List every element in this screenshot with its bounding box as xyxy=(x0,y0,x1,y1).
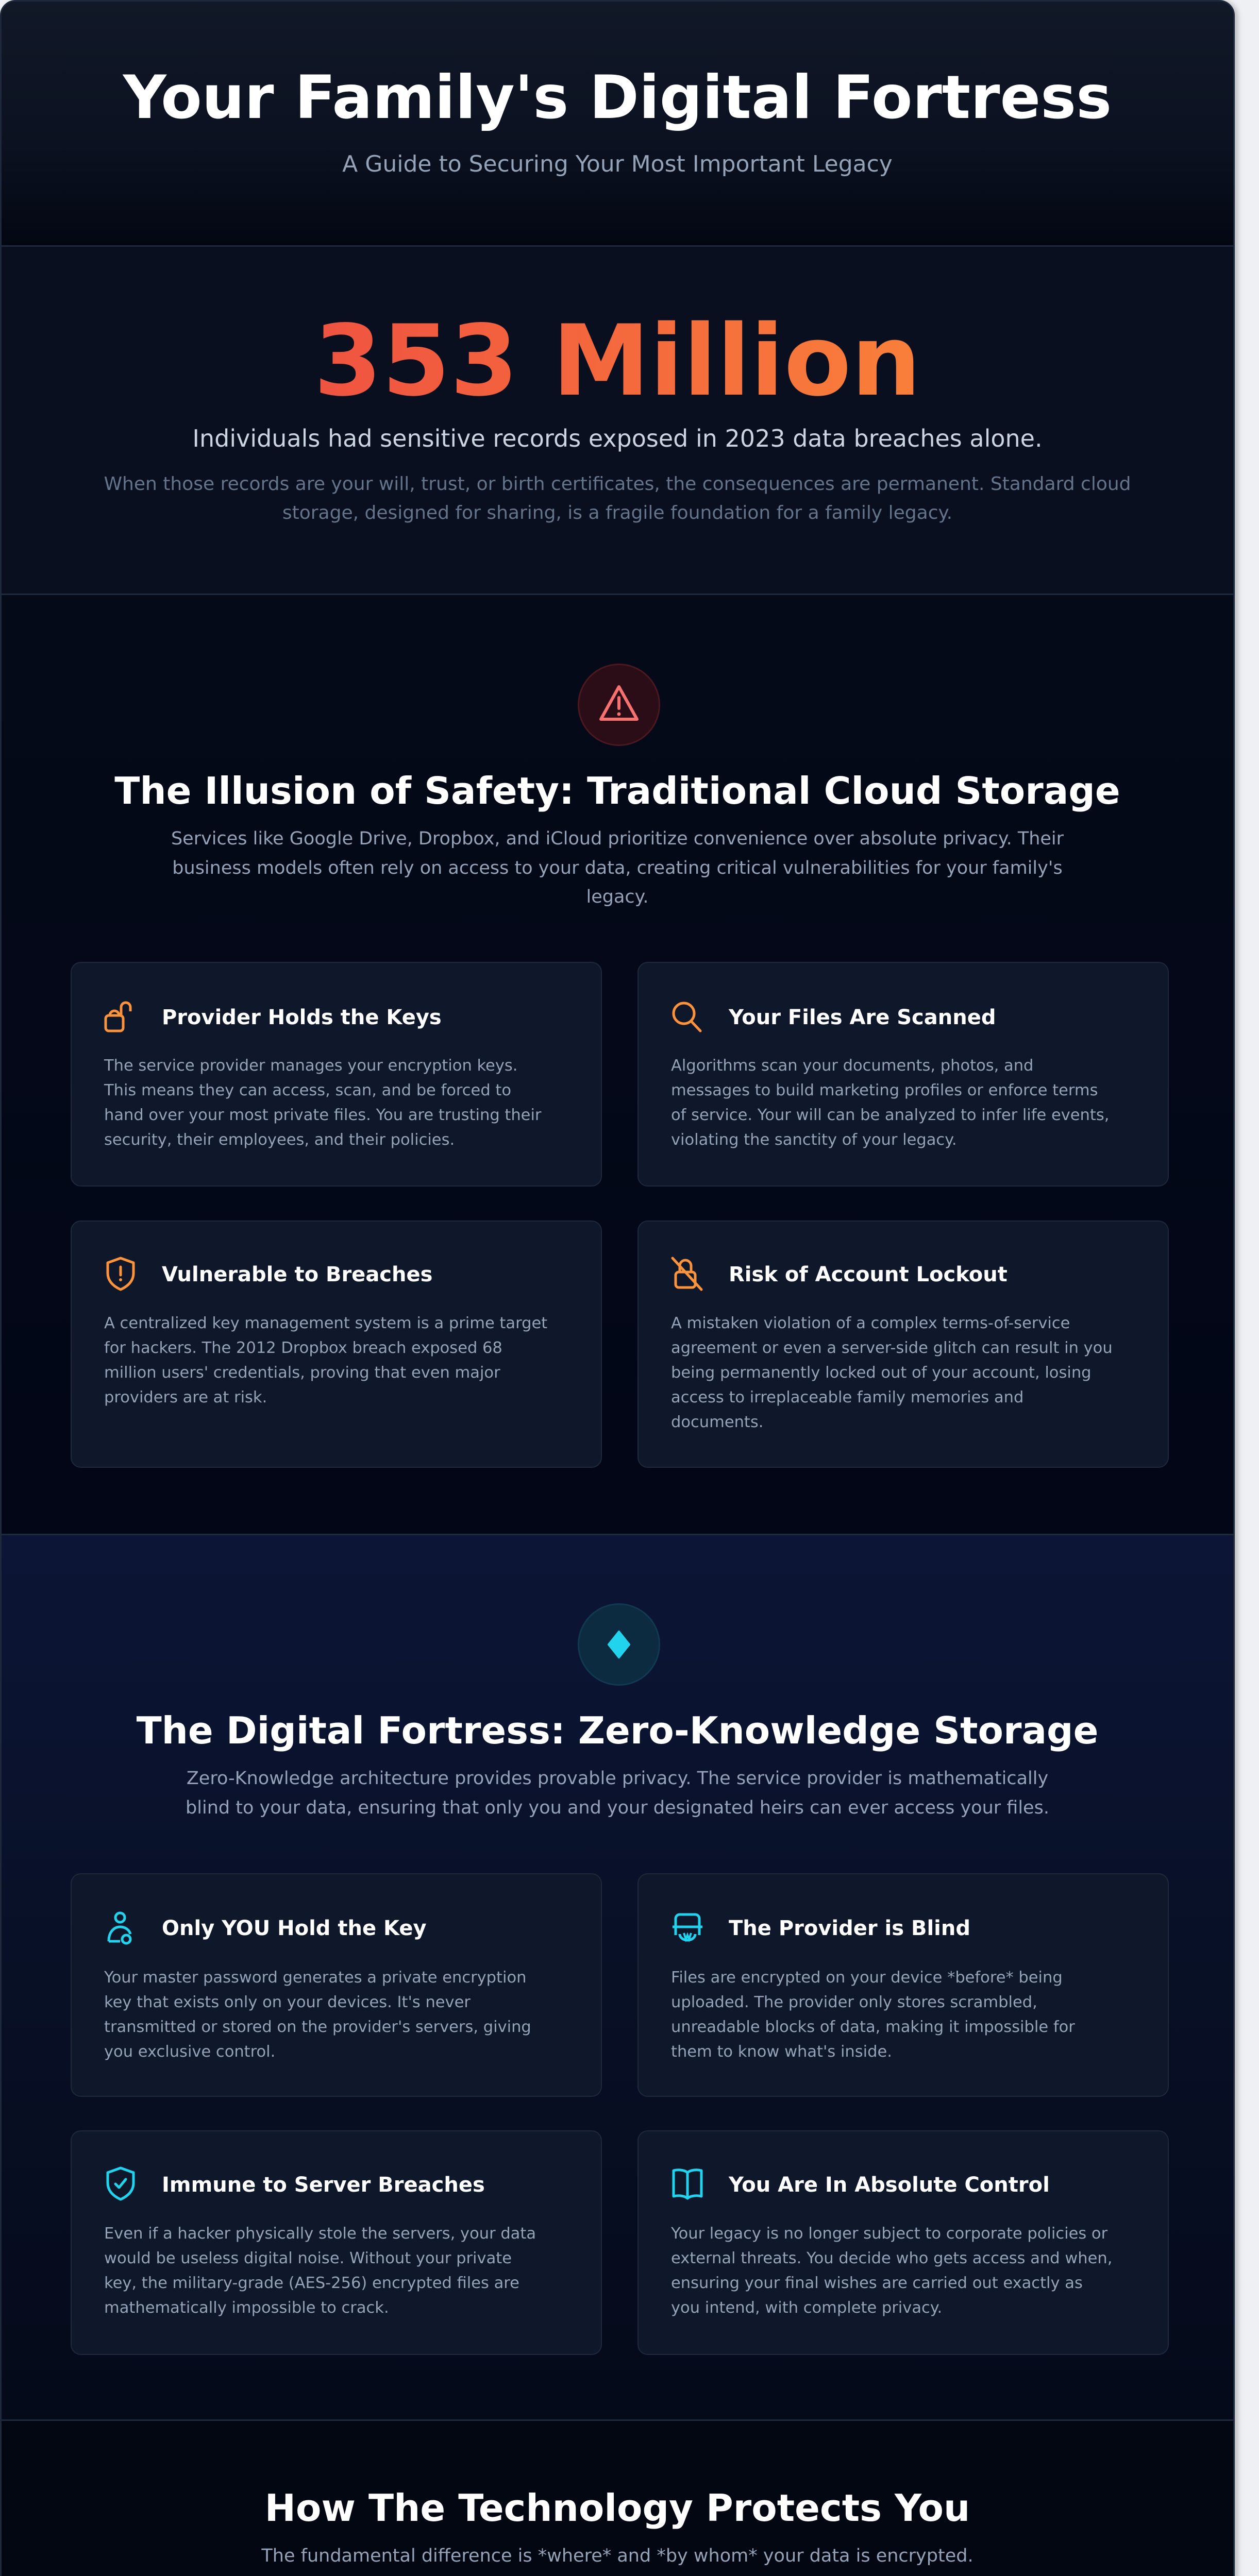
description xyxy=(171,828,1064,907)
card: breaches xyxy=(71,1221,602,1468)
heading: The Illusion of Safety: Traditional Cloud Storage xyxy=(114,769,1120,812)
card: files scanned: messages to build marketing profiles or enforce terms xyxy=(671,1081,1098,1099)
card: immune to breaches: key, the military-grade (AES-256) encrypted files are xyxy=(104,2274,519,2292)
card: only you hold key xyxy=(71,1873,602,2097)
panel: zero-knowledge xyxy=(2,1535,1233,2421)
panel: how technology protects xyxy=(2,2421,1233,2576)
icon: crossed lock xyxy=(671,1257,703,1291)
icon: shield check xyxy=(106,2167,135,2201)
header section xyxy=(2,2,1233,247)
card: provider blind xyxy=(637,1873,1169,2097)
card: provider holds keys xyxy=(71,962,602,1187)
icon: unlocked padlock xyxy=(104,1002,132,1032)
card: immune to breaches: mathematically impossible to crack. xyxy=(104,2299,389,2317)
stat explanation: storage, designed for sharing, is a fragile foundation for a family legacy. xyxy=(282,502,952,523)
card: files scanned: Algorithms scan your documents, photos, and xyxy=(671,1057,1033,1075)
big stat number: 353 Million xyxy=(314,304,921,418)
card: account lockout: Risk of Account Lockout xyxy=(729,1263,1008,1286)
card: account lockout: being permanently locked out of your account, losing xyxy=(671,1364,1092,1382)
description: blind to your data, ensuring that only you and your designated heirs can ever access your files. xyxy=(186,1797,1049,1818)
card: provider holds keys: Provider Holds the Keys xyxy=(162,1006,442,1029)
stat section xyxy=(2,247,1233,595)
card: account lockout: agreement or even a server-side glitch can result in you xyxy=(671,1339,1113,1357)
card: only you hold key: Only YOU Hold the Key xyxy=(162,1917,427,1940)
card: absolute control xyxy=(637,2130,1169,2355)
card: only you hold key: Your master password generates a private encryption xyxy=(104,1969,526,1987)
card: account lockout: access to irreplaceable family memories and xyxy=(671,1388,1023,1406)
description: Services like Google Drive, Dropbox, and iCloud prioritize convenience over absolute privacy. Their xyxy=(171,828,1064,849)
card: immune to breaches: would be useless digital noise. Without your private xyxy=(104,2249,512,2267)
card: absolute control: ensuring your final wishes are carried out exactly as xyxy=(671,2274,1083,2292)
card: immune to breaches xyxy=(71,2130,602,2355)
card: files scanned: of service. Your will can be analyzed to infer life events, xyxy=(671,1106,1109,1124)
card: only you hold key: transmitted or stored on the provider's servers, giving xyxy=(104,2018,531,2036)
icon: warning xyxy=(578,664,660,746)
icon: user key xyxy=(107,1911,132,1944)
card: breaches: providers are at risk. xyxy=(104,1388,267,1406)
stat caption: Individuals had sensitive records exposed in 2023 data breaches alone. xyxy=(192,425,1043,452)
card: breaches: million users' credentials, proving that even major xyxy=(104,1364,500,1382)
icon: diamond xyxy=(578,1603,660,1686)
card: breaches: Vulnerable to Breaches xyxy=(162,1263,432,1286)
card: account lockout: A mistaken violation of a complex terms-of-service xyxy=(671,1314,1070,1332)
stat explanation: When those records are your will, trust, or birth certificates, the consequences are permanent. Standard cloud xyxy=(104,473,1131,495)
card: only you hold key: key that exists only on your devices. It's never xyxy=(104,1993,471,2011)
heading: The Digital Fortress: Zero-Knowledge Storage xyxy=(137,1709,1098,1752)
card: provider holds keys: security, their employees, and their policies. xyxy=(104,1131,455,1149)
card: provider blind: uploaded. The provider only stores scrambled, xyxy=(671,1993,1037,2011)
card: files scanned xyxy=(637,962,1169,1187)
card: absolute control: external threats. You decide who gets access and when, xyxy=(671,2249,1112,2267)
card: provider blind: Files are encrypted on your device *before* being xyxy=(671,1969,1063,1987)
card: absolute control: you intend, with complete privacy. xyxy=(671,2299,942,2317)
card: account lockout xyxy=(637,1221,1169,1468)
card: files scanned: Your Files Are Scanned xyxy=(729,1006,996,1029)
description: Zero-Knowledge architecture provides provable privacy. The service provider is mathematically xyxy=(187,1768,1048,1789)
card: provider holds keys: This means they can access, scan, and be forced to xyxy=(104,1081,511,1099)
card: provider blind: The Provider is Blind xyxy=(729,1917,970,1940)
icon: shield alert xyxy=(106,1257,135,1291)
description xyxy=(186,1768,1049,1818)
card: provider blind: unreadable blocks of data, making it impossible for xyxy=(671,2018,1075,2036)
stat explanation xyxy=(104,473,1131,523)
title: Your Family's Digital Fortress xyxy=(123,63,1112,132)
card: provider holds keys: The service provider manages your encryption keys. xyxy=(104,1057,517,1075)
card: breaches: A centralized key management system is a prime target xyxy=(104,1314,547,1332)
icon: magnifier xyxy=(672,1002,702,1032)
card: account lockout: documents. xyxy=(671,1413,763,1431)
card: immune to breaches: Even if a hacker physically stole the servers, your data xyxy=(104,2225,536,2243)
description: legacy. xyxy=(586,887,648,907)
description: business models often rely on access to your data, creating critical vulnerabilities for your family's xyxy=(172,857,1063,878)
card: only you hold key: you exclusive control. xyxy=(104,2043,275,2061)
subtitle: A Guide to Securing Your Most Important Legacy xyxy=(342,151,893,177)
heading: How The Technology Protects You xyxy=(265,2486,970,2530)
card: breaches: for hackers. The 2012 Dropbox breach exposed 68 xyxy=(104,1339,502,1357)
card: provider blind: them to know what's inside. xyxy=(671,2043,892,2061)
panel: illusion of safety xyxy=(2,595,1233,1535)
icon: blind server xyxy=(673,1913,702,1942)
subheading: The fundamental difference is *where* and *by whom* your data is encrypted. xyxy=(261,2546,973,2566)
card: absolute control: Your legacy is no longer subject to corporate policies or xyxy=(671,2225,1107,2243)
card: absolute control: You Are In Absolute Control xyxy=(729,2173,1050,2197)
card: files scanned: violating the sanctity of your legacy. xyxy=(671,1131,957,1149)
icon: open book xyxy=(672,2168,703,2200)
card: provider holds keys: hand over your most private files. You are trusting their xyxy=(104,1106,541,1124)
card: immune to breaches: Immune to Server Breaches xyxy=(162,2173,485,2197)
